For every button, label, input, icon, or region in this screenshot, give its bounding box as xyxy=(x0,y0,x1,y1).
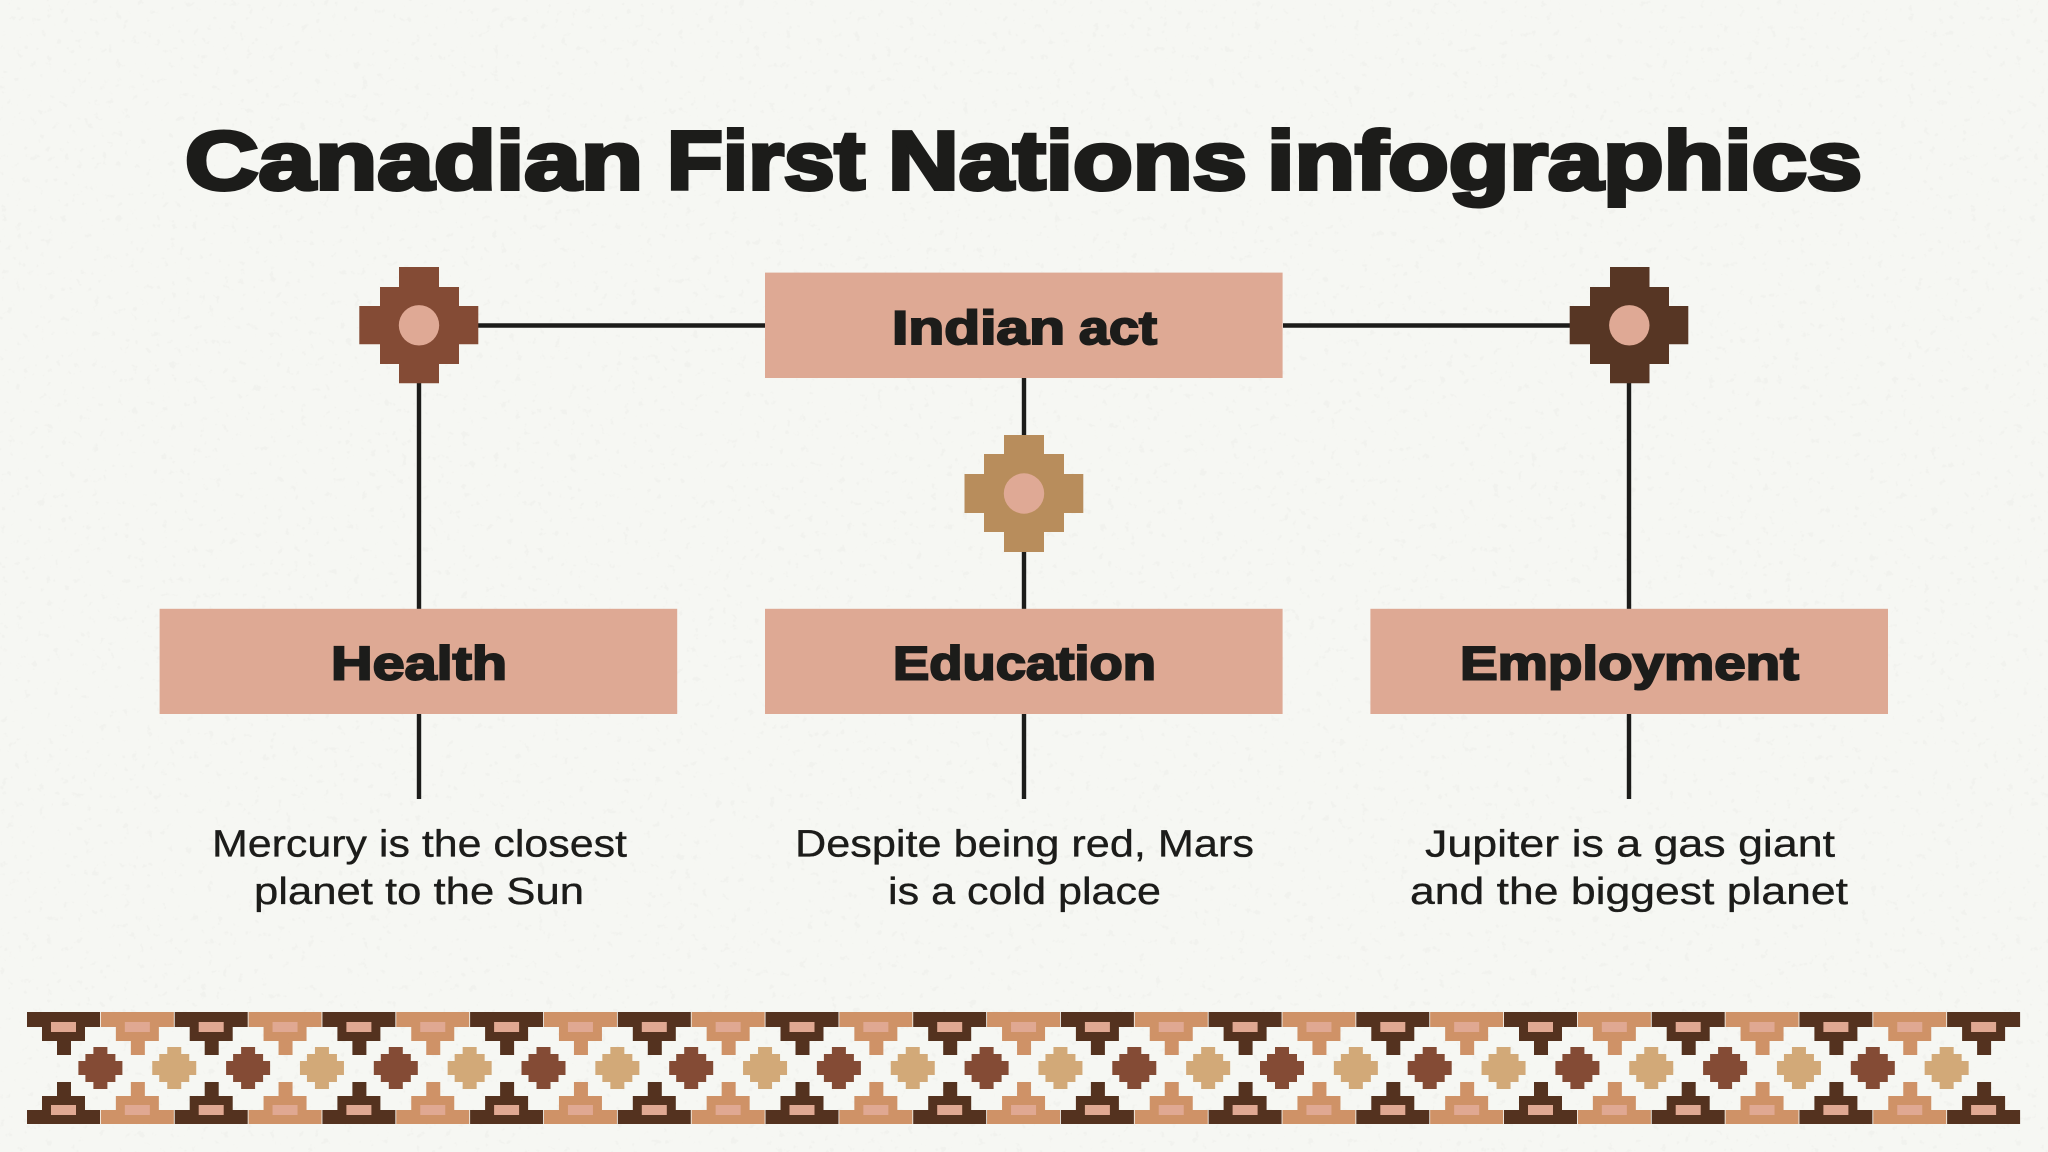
description: Employment: Jupiter is a gas giant xyxy=(1425,824,1836,866)
box: Indian act: Indian xyxy=(892,301,1065,354)
column: Education xyxy=(765,609,1283,913)
box: Health xyxy=(160,609,677,714)
icon: brown stepped diamond xyxy=(359,267,478,383)
title: First xyxy=(667,114,865,207)
box: Indian act xyxy=(765,273,1283,378)
icon: tan stepped diamond xyxy=(964,435,1083,552)
description: Health: planet to the Sun xyxy=(254,871,584,913)
description: Education: Despite being red, Mars xyxy=(795,824,1254,866)
box: Health: Health xyxy=(331,636,507,690)
box: Indian act: act xyxy=(1079,301,1157,354)
description: Education xyxy=(795,824,1254,913)
box: Employment xyxy=(1370,609,1888,714)
description: Employment xyxy=(1410,824,1849,913)
decorative patterned band xyxy=(27,1012,2020,1124)
band tiles xyxy=(27,1012,2020,1124)
title: Nations xyxy=(888,114,1247,207)
column: Employment xyxy=(1370,609,1888,913)
title: infographics xyxy=(1267,114,1862,207)
description: Health: Mercury is the closest xyxy=(212,824,627,866)
description: Education: is a cold place xyxy=(888,871,1161,913)
title xyxy=(185,114,1862,207)
title: Canadian xyxy=(185,114,643,207)
description: Employment: and the biggest planet xyxy=(1410,871,1849,913)
box: Education xyxy=(765,609,1283,714)
box: Employment: Employment xyxy=(1460,636,1799,690)
icon: dark stepped diamond xyxy=(1570,267,1688,383)
box: Education: Education xyxy=(893,636,1156,690)
description: Health xyxy=(212,824,627,913)
connector lines xyxy=(419,326,1629,799)
band diamonds xyxy=(78,1047,1969,1089)
column: Health xyxy=(160,609,677,913)
